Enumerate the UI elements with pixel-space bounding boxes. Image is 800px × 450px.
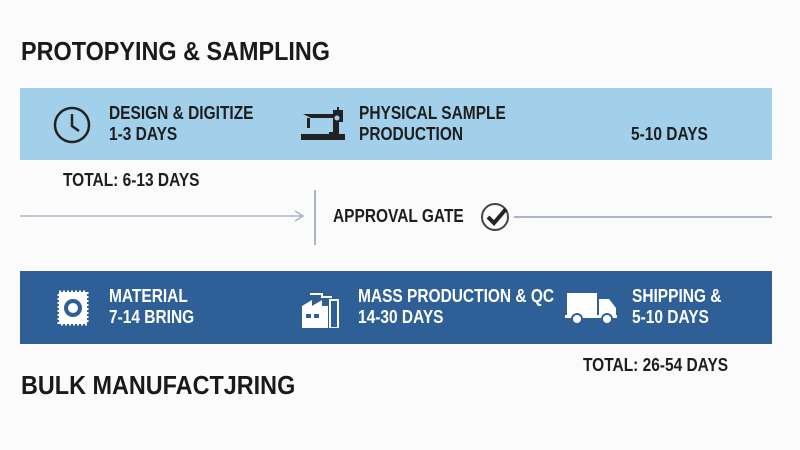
text: physical sample	[359, 103, 506, 144]
text: material: 7-14 BRING	[109, 307, 194, 327]
text: shipping: SHIPPING &	[632, 286, 721, 306]
text: design	[109, 103, 253, 144]
line: after approval	[514, 216, 772, 218]
text: material: MATERIAL	[109, 286, 188, 306]
text: material	[109, 286, 194, 327]
arrow: to approval	[20, 210, 304, 222]
text: physical sample: PRODUCTION	[359, 124, 463, 144]
icon: truck	[565, 293, 617, 323]
text: total sampling: TOTAL: 6-13 DAYS	[63, 170, 199, 190]
text: mass production: MASS PRODUCTION & QC	[358, 286, 554, 306]
text: approval gate: APPROVAL GATE	[333, 206, 464, 226]
text: 5-10 days: 5-10 DAYS	[631, 124, 708, 144]
text: mass production	[358, 286, 554, 327]
text: mass production: 14-30 DAYS	[358, 307, 443, 327]
divider line vertical	[314, 190, 316, 245]
text: shipping	[632, 286, 721, 327]
panel: bulk band	[20, 271, 772, 344]
panel: sampling band	[20, 88, 772, 160]
text: total bulk: TOTAL: 26-54 DAYS	[583, 355, 728, 375]
icon: clock	[54, 106, 90, 144]
icon: check	[481, 203, 509, 231]
text: physical sample: PHYSICAL SAMPLE	[359, 103, 506, 123]
text: design: 1-3 DAYS	[109, 124, 177, 144]
title: prototyping: PROTOPYING & SAMPLING	[21, 36, 330, 66]
icon: material	[58, 290, 88, 326]
icon: sewing machine	[301, 107, 345, 140]
icon: factory	[302, 293, 339, 328]
title: bulk: BULK MANUFACTJRING	[21, 370, 295, 400]
text: shipping: 5-10 DAYS	[632, 307, 709, 327]
text: design: DESIGN & DIGITIZE	[109, 103, 253, 123]
